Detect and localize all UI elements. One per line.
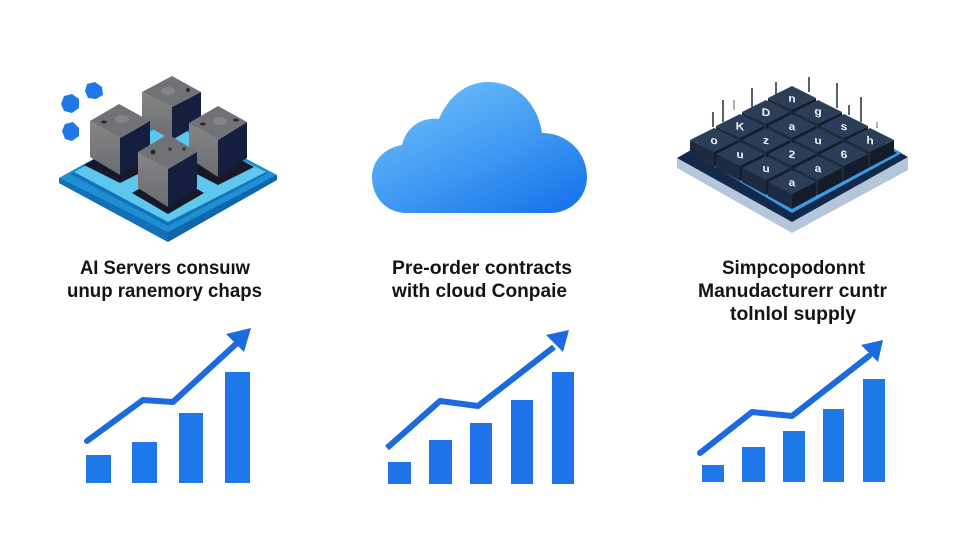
caption: manufacturer supply	[698, 258, 888, 325]
keys: a	[789, 177, 796, 189]
chip: back cube	[142, 76, 201, 140]
bars	[86, 372, 250, 483]
keys: u	[736, 149, 744, 161]
chip: front cube	[138, 134, 197, 207]
chart: growth 1	[86, 328, 251, 483]
bars	[388, 372, 574, 484]
caption: manufacturer supply: Manudacturerr cuntr	[698, 281, 888, 302]
keys: o	[710, 135, 718, 147]
keys: D	[762, 107, 770, 119]
arrow	[387, 330, 569, 448]
icon: floating blue hexagons	[61, 82, 103, 141]
chip: right cube	[189, 106, 247, 177]
caption: manufacturer supply: Simpcopodonnt	[722, 258, 866, 279]
caption: AI servers	[67, 258, 262, 302]
keys: u	[762, 163, 770, 175]
caption: pre-order contracts: with cloud Conpaie	[391, 281, 567, 302]
chip plinths	[84, 145, 254, 214]
keys: 6	[841, 149, 847, 161]
keys: 2	[789, 149, 795, 161]
icon: AI server chips on board	[59, 76, 277, 242]
keys: h	[866, 135, 874, 147]
caption: AI servers: AI Servers consuıw	[80, 258, 250, 279]
bars	[702, 379, 885, 482]
keys: s	[841, 121, 847, 133]
chart: growth 3	[700, 340, 885, 482]
keys: a	[815, 163, 822, 175]
keys: n	[788, 93, 796, 105]
chart: growth 2	[387, 330, 574, 484]
keys: a	[789, 121, 796, 133]
arrow	[700, 340, 883, 453]
pins	[713, 77, 877, 128]
base plate	[677, 92, 908, 233]
caption: AI servers: unup ranemory chaps	[67, 281, 262, 302]
icon: cloud	[372, 82, 587, 213]
arrow	[87, 328, 251, 441]
keys: u	[814, 135, 822, 147]
chip: left cube	[90, 104, 150, 175]
keys: g	[814, 106, 822, 118]
icon: semiconductor key grid	[677, 77, 908, 233]
caption: pre-order contracts: Pre-order contracts	[392, 258, 572, 279]
keys	[690, 86, 894, 209]
keys: z	[763, 135, 769, 147]
caption: pre-order contracts	[391, 258, 572, 302]
caption: manufacturer supply: tolnlol supply	[730, 304, 856, 325]
board	[59, 118, 277, 242]
keys: K	[736, 121, 745, 134]
